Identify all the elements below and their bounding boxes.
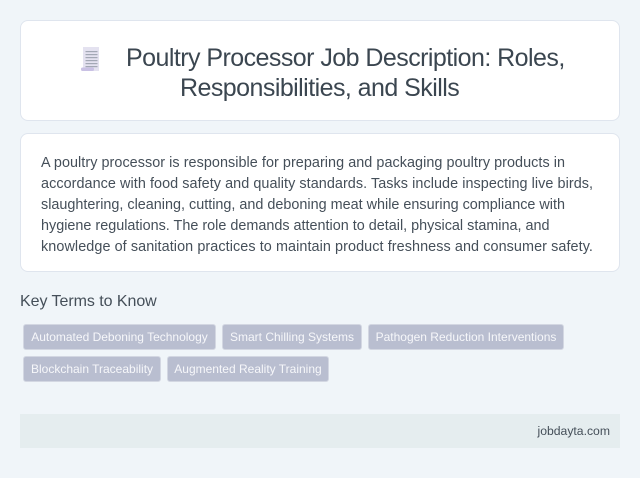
tag: automated deboning [23, 324, 216, 350]
heading: key terms: Key Terms to Know [20, 293, 157, 310]
tag: blockchain: Blockchain Traceability [31, 362, 153, 376]
title [126, 44, 565, 102]
footer bar [20, 414, 620, 448]
description text: knowledge of sanitation practices to maintain product freshness and consumer safety. [41, 239, 593, 255]
description text: accordance with food safety and quality standards. Tasks include inspecting live birds, [41, 176, 593, 192]
description text [41, 155, 593, 255]
description text: slaughtering, cleaning, cutting, and deboning meat while ensuring compliance with [41, 197, 565, 213]
tag: smart chilling: Smart Chilling Systems [230, 330, 354, 344]
tag: augmented reality: Augmented Reality Training [174, 362, 322, 376]
footer: site name: jobdayta.com [538, 424, 610, 438]
description text: hygiene regulations. The role demands attention to detail, physical stamina, and [41, 218, 550, 234]
tag: pathogen reduction [368, 324, 564, 350]
icon: document [81, 47, 99, 71]
tag: pathogen reduction: Pathogen Reduction Interventions [376, 330, 556, 344]
tag: automated deboning: Automated Deboning Technology [31, 330, 208, 344]
description panel [20, 133, 620, 272]
tag list [23, 324, 564, 382]
title: Responsibilities, and Skills [180, 74, 459, 102]
title: Poultry Processor Job Description: Roles, [126, 44, 565, 72]
header panel [20, 20, 620, 121]
tag: smart chilling [222, 324, 362, 350]
description text: A poultry processor is responsible for preparing and packaging poultry products in [41, 155, 565, 171]
tag: blockchain [23, 356, 161, 382]
tag: augmented reality [167, 356, 329, 382]
